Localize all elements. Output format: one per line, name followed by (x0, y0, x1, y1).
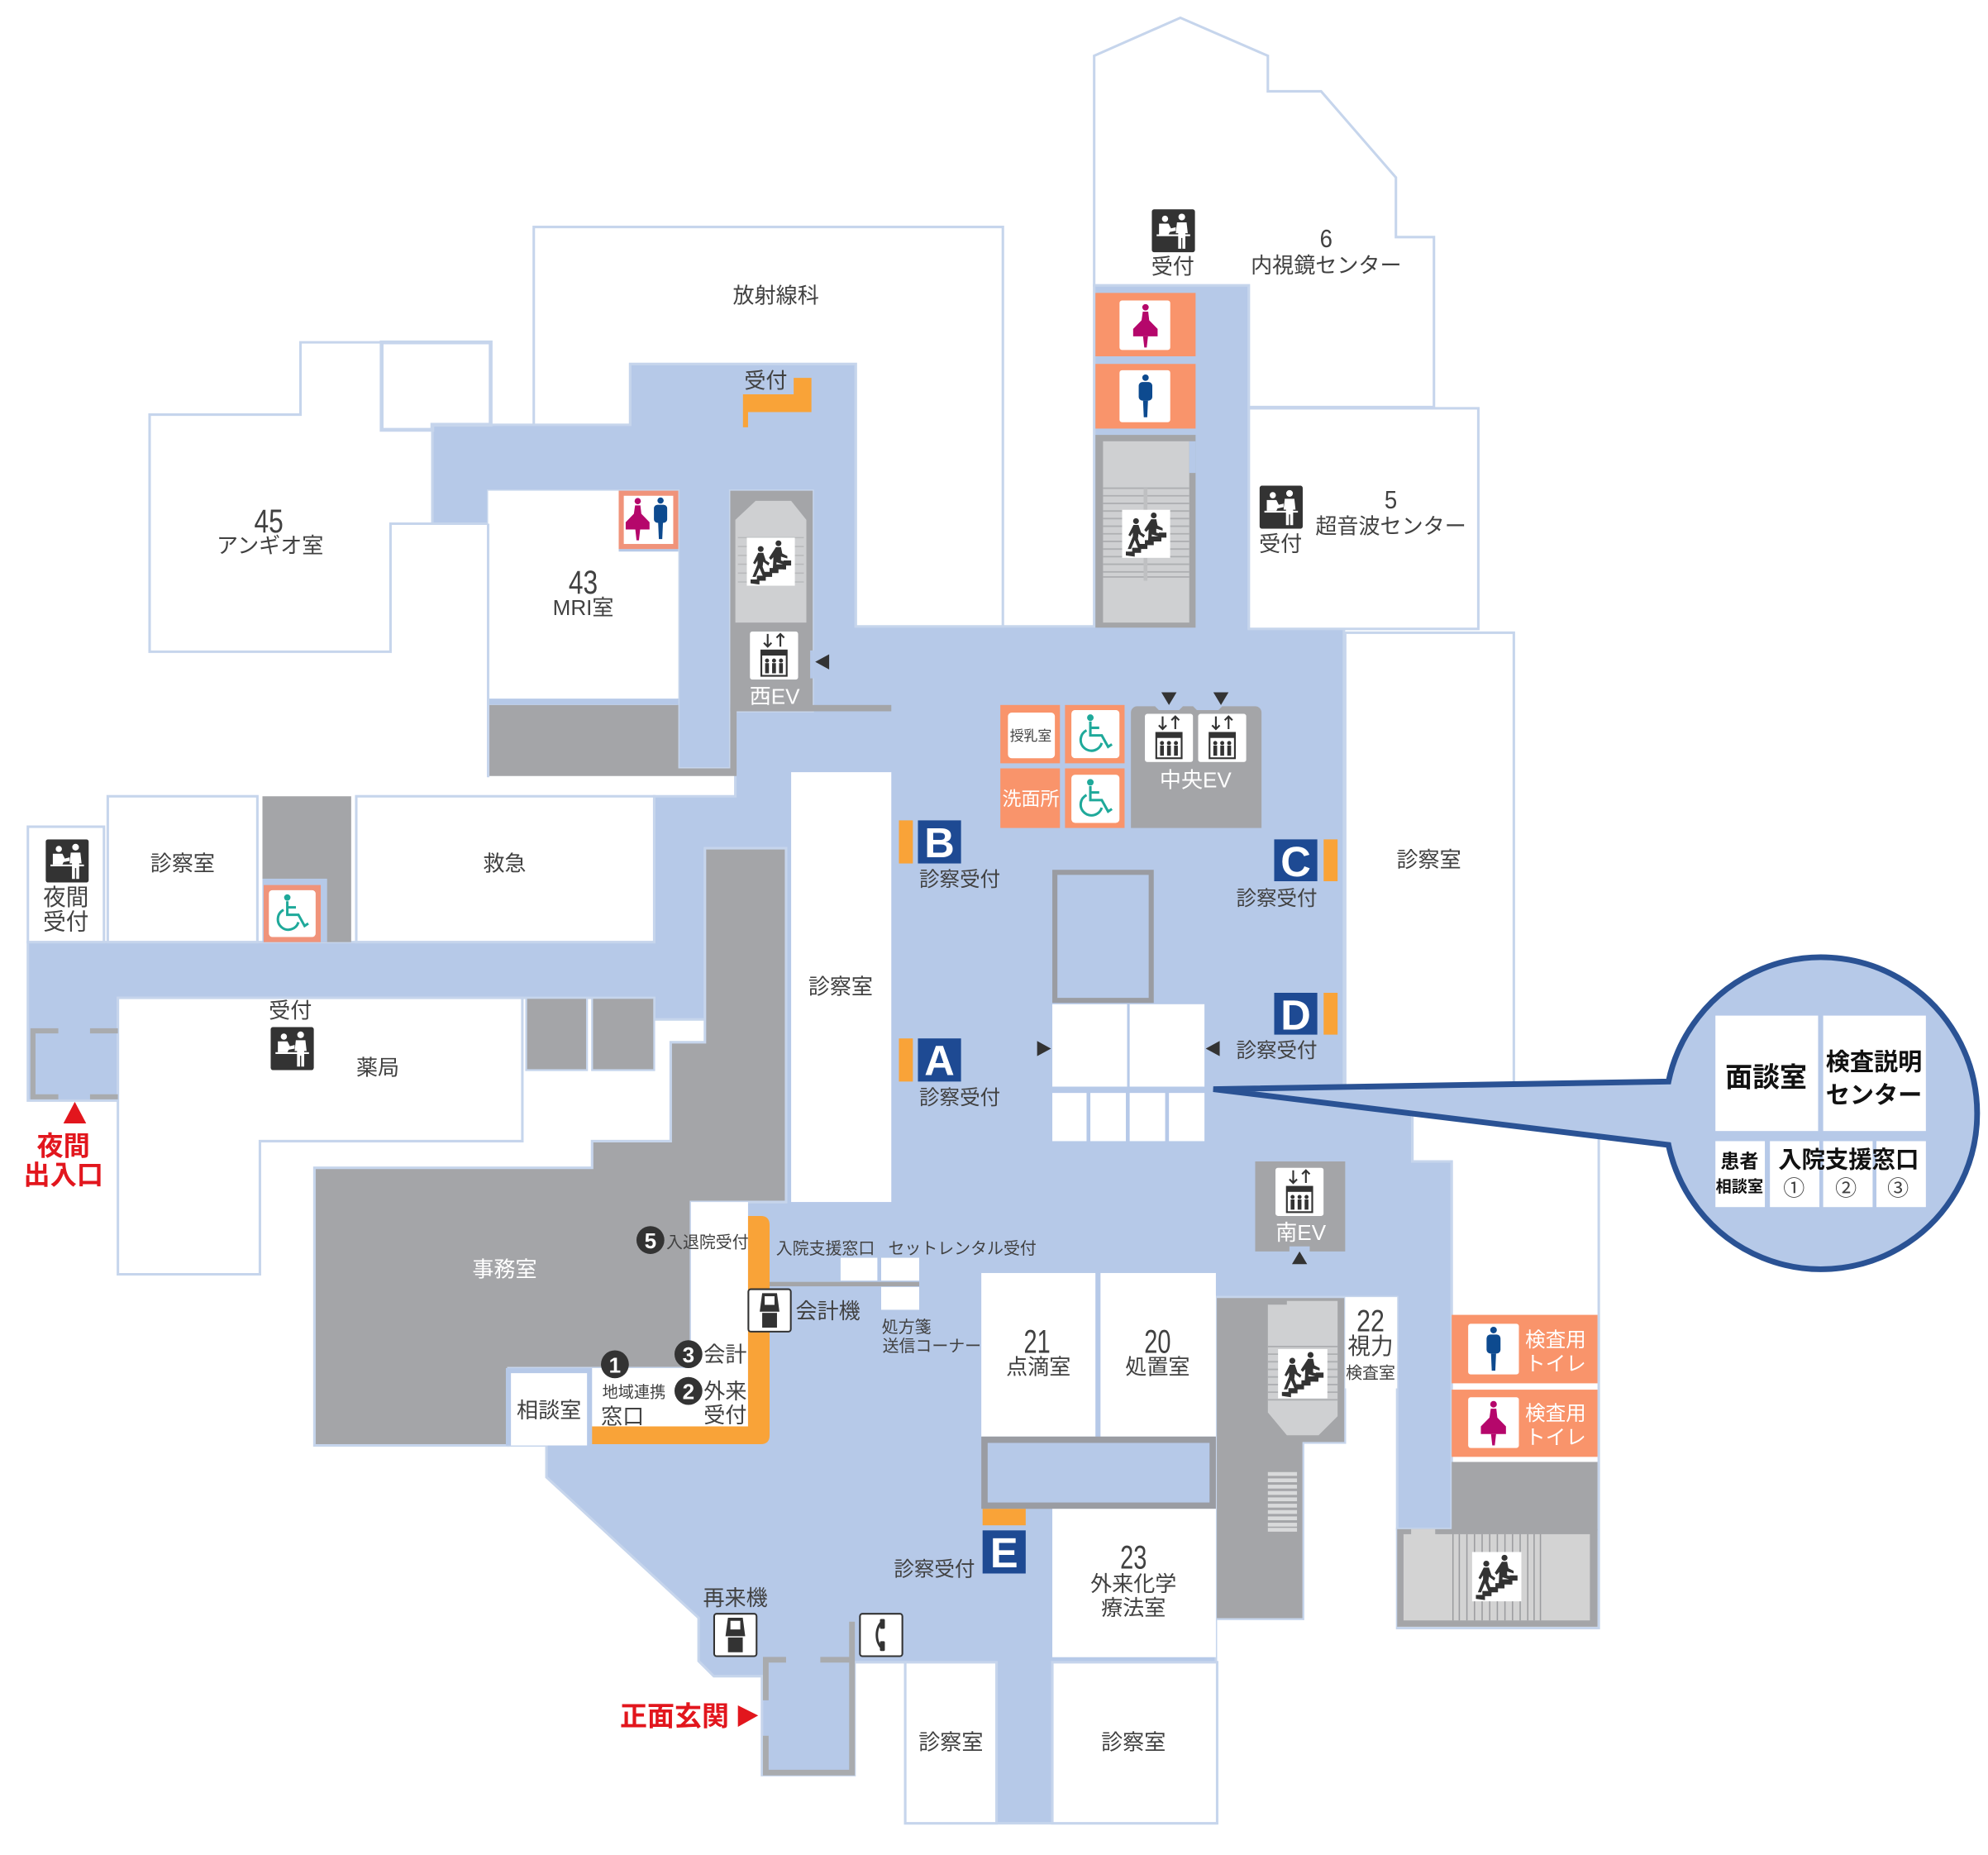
badge: 2: 2 (683, 1380, 694, 1404)
reception C (1274, 838, 1337, 885)
floor corridors (28, 285, 1452, 1824)
inspection toilet male (1452, 1315, 1598, 1383)
callout (1213, 957, 1977, 1269)
south elevator: 南EV (1275, 1220, 1327, 1245)
inspection toilet female (1452, 1390, 1598, 1457)
southeast stair (1397, 1529, 1598, 1627)
label: accounting: 会計 (703, 1342, 746, 1366)
label: 45: 45 (255, 503, 284, 540)
callout room: interview: 面談室 (1725, 1061, 1807, 1092)
MRI lower utility area (489, 523, 737, 777)
reception E (983, 1509, 1026, 1576)
callout room: patient consultation (1715, 1141, 1765, 1207)
night entrance marker: 夜間 (37, 1131, 90, 1161)
arrows: central EV (1161, 692, 1228, 705)
callout windows: ② (1835, 1175, 1857, 1200)
arrow: west EV (815, 654, 829, 670)
icon: night reception (45, 839, 88, 883)
west elevator and stair block: 西EV (750, 684, 800, 708)
callout room: exam explanation (1824, 1016, 1926, 1131)
icon: phone (860, 1614, 903, 1657)
office (314, 848, 786, 1446)
label: return machine: 再来機 (703, 1586, 768, 1610)
reception E: E (990, 1529, 1018, 1576)
label: emergency: 救急 (483, 851, 527, 876)
south utility and stair block (1216, 1297, 1345, 1619)
wall: west EV line (730, 705, 891, 711)
night entrance marker (23, 1102, 103, 1190)
west utility (262, 796, 351, 942)
main entrance frame (765, 1622, 852, 1772)
callout room: patient consultation: 相談室 (1716, 1178, 1763, 1196)
radiology orange counter (743, 378, 812, 427)
label: consultation: 相談室 (517, 1398, 581, 1423)
reception B: B (924, 819, 955, 866)
label: endoscopy number: 6 (1320, 225, 1332, 253)
reception D: D (1280, 991, 1311, 1038)
room: pharmacy (118, 998, 522, 1274)
label: west exam: 診察室 (150, 851, 215, 876)
label: 22: 22 (1356, 1304, 1385, 1338)
room: 20 (1100, 1273, 1216, 1437)
room: south exam 2 (1052, 1662, 1217, 1824)
label: radiology: 放射線科 (733, 284, 819, 308)
icon: kiosk return (714, 1614, 756, 1657)
label: south exam 1: 診察室 (918, 1730, 983, 1755)
callout room: exam explanation: センター (1826, 1081, 1922, 1109)
toilet: north male (1095, 364, 1195, 428)
room: radiology (534, 227, 1003, 627)
room: consultation (506, 1368, 592, 1446)
label: radiology reception: 受付 (744, 368, 787, 393)
orange counter (592, 1216, 770, 1444)
badge: 1: 1 (609, 1352, 621, 1377)
label: prescription corner: 送信コーナー (883, 1337, 981, 1356)
inspection toilet female: 検査用 (1525, 1402, 1586, 1425)
label: admission: 入退院受付 (666, 1233, 749, 1252)
label: night reception: 夜間 (43, 885, 88, 910)
badge: 1 (601, 1351, 629, 1378)
reception A (899, 1037, 961, 1085)
label: reception E: 診察受付 (894, 1558, 975, 1581)
callout windows: ① (1783, 1175, 1804, 1200)
label: accounting machine: 会計機 (795, 1299, 861, 1323)
reception D (1274, 991, 1337, 1038)
label: outpatient: 外来 (703, 1379, 746, 1404)
label: prescription: 処方箋 (882, 1318, 932, 1337)
label: treatment: 処置室 (1125, 1355, 1189, 1380)
icon: kiosk accounting (748, 1290, 791, 1332)
label: reception B: 診察受付 (919, 868, 1000, 891)
callout room: exam explanation: 検査説明 (1826, 1049, 1922, 1076)
room: central exam column (791, 772, 891, 1202)
toilet: west (618, 491, 679, 551)
south elevator (1255, 1161, 1345, 1252)
label: ultrasound number: 5 (1385, 486, 1397, 514)
label: south exam 2: 診察室 (1101, 1730, 1166, 1755)
label: window: 窓口 (601, 1404, 644, 1428)
labels (43, 225, 1466, 1755)
label: ultrasound: 超音波センター (1315, 514, 1466, 539)
room: small store (382, 342, 491, 430)
arrows: central rooms (1037, 1041, 1220, 1056)
washroom (1000, 769, 1060, 828)
nursing room: 授乳室 (1010, 728, 1051, 744)
label: office: 事務室 (472, 1257, 537, 1282)
callout bubble (1213, 957, 1977, 1269)
label: endoscopy reception: 受付 (1151, 254, 1194, 279)
label: angio: アンギオ室 (217, 533, 323, 558)
label: reception A: 診察受付 (919, 1086, 1000, 1109)
label: 21: 21 (1024, 1324, 1051, 1361)
label: reception D: 診察受付 (1236, 1039, 1318, 1062)
label: ultrasound reception: 受付 (1259, 532, 1302, 556)
label: vision: 視力 (1347, 1333, 1394, 1359)
badge: 5 (636, 1226, 665, 1254)
badge: 3: 3 (683, 1342, 694, 1367)
reception C: C (1280, 838, 1311, 885)
label: chemo: 外来化学 (1090, 1571, 1176, 1596)
windows and wall: admission support (770, 1258, 919, 1309)
label: 43: 43 (569, 565, 598, 601)
nursing room (1000, 705, 1060, 763)
callout room: interview (1715, 1016, 1818, 1131)
label: night reception 2: 受付 (43, 908, 88, 934)
north stair (1095, 435, 1195, 627)
toilet: north female (1095, 293, 1195, 356)
label: 23: 23 (1120, 1539, 1147, 1576)
badge: 5: 5 (645, 1228, 656, 1253)
southeast gray block (1452, 1462, 1598, 1530)
label: endoscopy: 内視鏡センター (1251, 253, 1402, 278)
main entrance marker: 正面玄関 (620, 1701, 729, 1732)
badge: 3 (675, 1340, 703, 1368)
wheelchair toilet lower (1065, 769, 1124, 828)
wheelchair toilet west (264, 885, 321, 942)
label: vision exam: 検査室 (1346, 1363, 1395, 1382)
reception A: A (924, 1037, 955, 1085)
central void (1055, 872, 1151, 1000)
room: 6 endoscopy (1094, 17, 1434, 407)
icon: ultrasound reception (1260, 485, 1303, 529)
room: west exam (107, 796, 257, 942)
callout windows: ③ (1887, 1175, 1909, 1200)
room: south exam 1 (905, 1662, 997, 1824)
label: chemo 2: 療法室 (1101, 1595, 1166, 1620)
washroom: 洗面所 (1002, 788, 1059, 809)
wheelchair toilet upper (1065, 705, 1124, 763)
icon: pharmacy reception (270, 1027, 314, 1071)
label: east exam: 診察室 (1397, 847, 1461, 872)
reception B (899, 819, 961, 866)
callout windows (1770, 1141, 1926, 1207)
west elevator and stair block (730, 491, 814, 711)
inspection toilet female: トイレ (1525, 1427, 1586, 1449)
central elevators: 中央EV (1160, 768, 1232, 793)
room: emergency (356, 796, 654, 942)
room: night reception (28, 827, 104, 942)
room: southeast block (1397, 1103, 1599, 1628)
label: reception C: 診察受付 (1236, 887, 1318, 910)
label: pharmacy reception: 受付 (269, 999, 312, 1023)
label: drip: 点滴室 (1006, 1355, 1070, 1380)
icon: endoscopy reception (1151, 209, 1195, 252)
room: 21 (981, 1273, 1095, 1437)
central consultation rooms (1052, 1004, 1204, 1141)
arrow: south EV (1292, 1252, 1307, 1264)
counter area white (592, 1202, 748, 1427)
callout room: patient consultation: 患者 (1720, 1151, 1758, 1172)
label: set rental: セットレンタル受付 (889, 1239, 1037, 1258)
label: MRI: MRI室 (553, 595, 613, 620)
night entrance frame (33, 1031, 118, 1097)
label: 20: 20 (1144, 1324, 1170, 1361)
central elevators (1131, 706, 1261, 828)
callout windows: 入院支援窓口 (1778, 1147, 1919, 1174)
label: outpatient reception: 受付 (703, 1403, 746, 1428)
room: 5 ultrasound (1249, 408, 1478, 629)
label: regional: 地域連携 (603, 1383, 665, 1401)
inspection toilet male: トイレ (1525, 1353, 1586, 1376)
label: pharmacy: 薬局 (356, 1056, 399, 1080)
label: admission support: 入院支援窓口 (776, 1239, 875, 1258)
room: 23 (1052, 1509, 1216, 1657)
room: east exam (1345, 632, 1514, 1100)
night entrance marker: 出入口 (23, 1161, 103, 1190)
room: 45 angio (150, 342, 432, 651)
gray frame below 20/21 (984, 1440, 1213, 1505)
label: central exam: 診察室 (808, 975, 873, 999)
pharmacy utility rooms (527, 998, 654, 1071)
room: 22 vision (1345, 1297, 1397, 1389)
room: 43 MRI (489, 491, 679, 699)
badge: 2 (675, 1377, 703, 1404)
inspection toilet male: 検査用 (1525, 1328, 1586, 1352)
